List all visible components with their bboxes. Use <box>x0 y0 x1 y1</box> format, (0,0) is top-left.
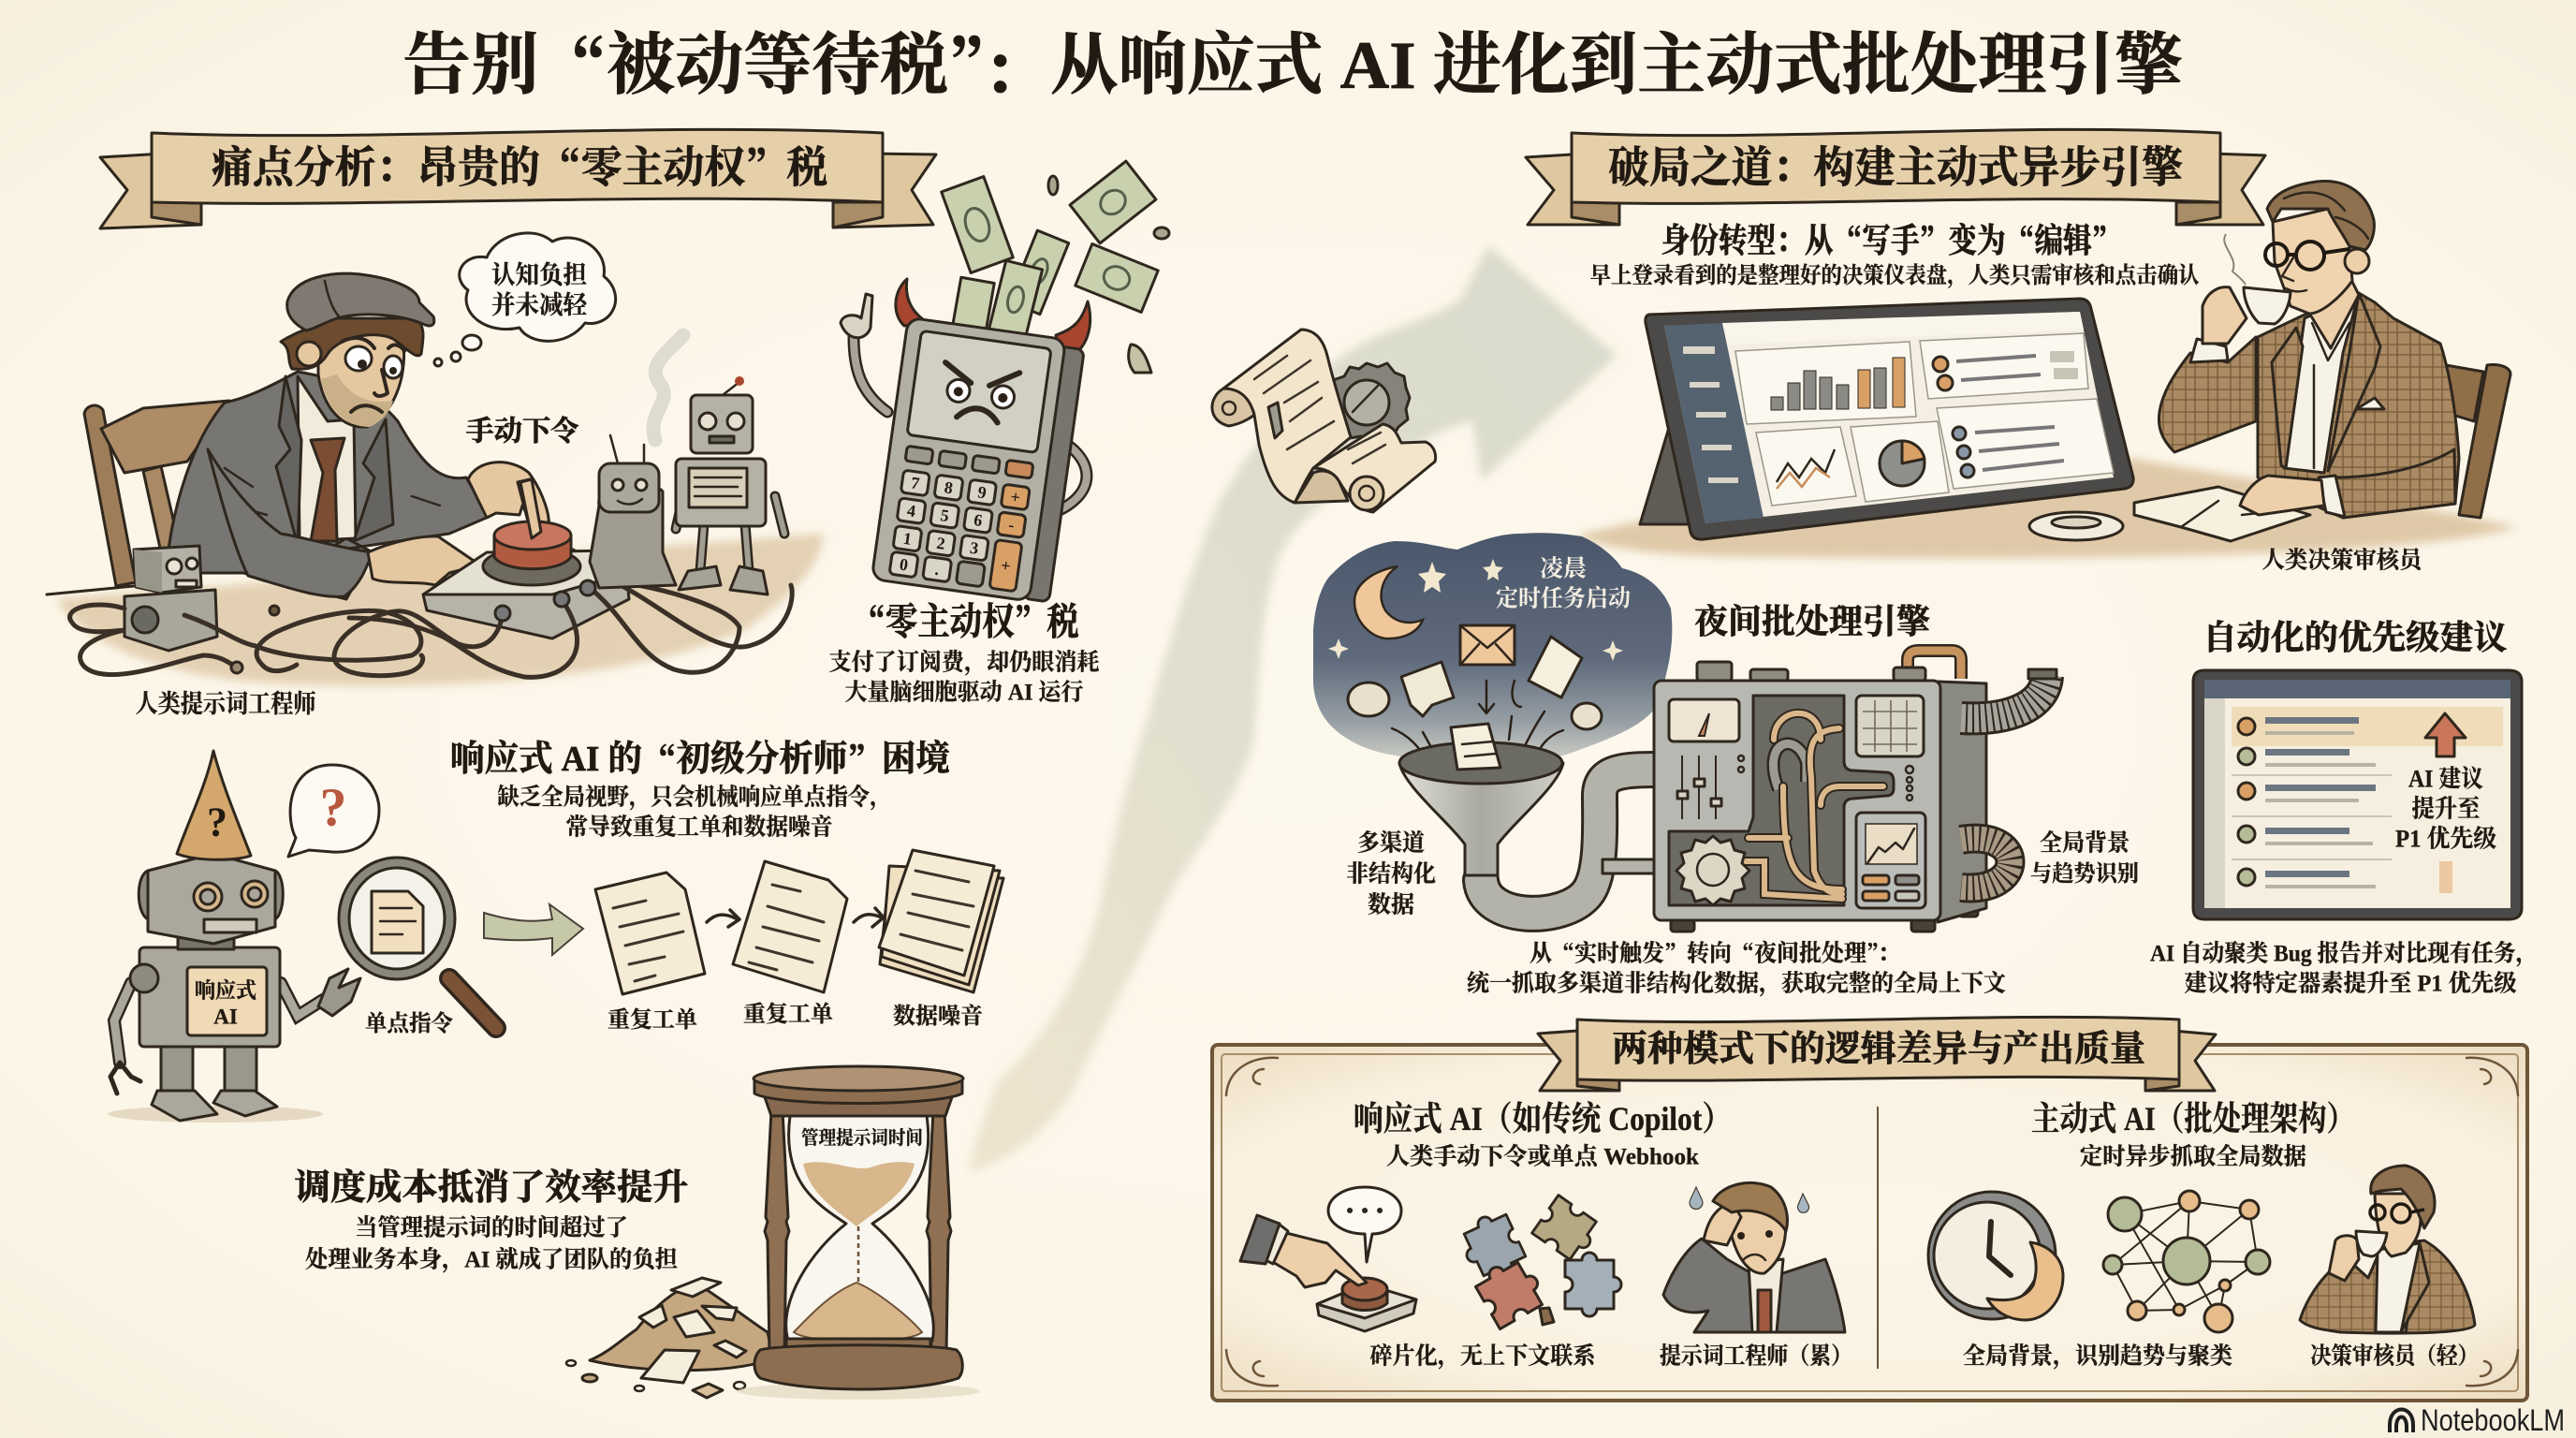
text: real-time to batch: 统一抓取多渠道非结构化数据，获取完整的全局上下文 <box>1467 970 2006 998</box>
face <box>2273 209 2352 314</box>
icon: calculator body: + <box>1009 487 1021 507</box>
illustration: priority tablet <box>2193 670 2522 919</box>
icon: calculator body: + <box>1000 556 1012 576</box>
label: multi-channel unstructured data: 非结构化 <box>1346 861 1436 888</box>
chart: pie chart card <box>1851 421 1949 502</box>
heading: nightly batch engine: 夜间批处理引擎 <box>1694 603 1930 640</box>
text: zero initiative tax: 大量脑细胞驱动 AI 运行 <box>844 680 1084 706</box>
icon: magnifying glass with single instruction <box>339 858 496 1028</box>
chart: line chart card <box>1756 427 1856 506</box>
icon: calculator arms and horns <box>841 279 1090 515</box>
illustration: priority tablet: 提升至 <box>2411 794 2481 822</box>
lower hand <box>2240 476 2324 515</box>
icon: document <box>1529 637 1582 697</box>
hair <box>2267 181 2374 250</box>
coffee cup <box>2244 287 2291 324</box>
text: AI clustering: 建议将特定器素提升至 P1 优先级 <box>2185 970 2516 996</box>
text: dispatch cost <box>294 1168 689 1273</box>
illustration: funnel and pipe <box>1399 724 1655 914</box>
icon: chat bubble <box>1348 682 1389 716</box>
icon: open book <box>2134 487 2310 541</box>
jacket <box>165 372 489 599</box>
icon: network graph <box>2103 1191 2270 1332</box>
illustration: responsive AI robot: ? <box>207 800 227 844</box>
icon: calculator body: 9 <box>976 482 988 502</box>
icon: calculator body: 6 <box>973 510 984 530</box>
illustration: two robots with smoke <box>590 335 784 594</box>
button box <box>423 550 629 638</box>
jacket <box>2258 293 2459 518</box>
arrow: ticket to ticket <box>707 910 739 927</box>
column: proactive AI <box>1928 1100 2479 1371</box>
illustration: zero-initiative calculator with flying money <box>841 161 1169 604</box>
title: 告别“被动等待税”：从响应式 AI 进化到主动式批处理引擎 <box>402 17 2183 114</box>
column: proactive AI: 决策审核员（轻） <box>2310 1343 2479 1369</box>
illustration: batch machine <box>1654 651 2056 932</box>
icon: wires <box>70 580 792 677</box>
column: responsive AI: 提示词工程师（累） <box>1660 1343 1852 1369</box>
text: AI clustering <box>2150 940 2538 996</box>
banner: pain points <box>100 129 936 228</box>
column: responsive AI: 碎片化，无上下文联系 <box>1370 1343 1596 1371</box>
icon: calculator body: - <box>1007 515 1016 535</box>
illustration: priority tablet: AI 建议 <box>2408 766 2483 792</box>
icon: calculator body: 8 <box>944 477 954 497</box>
table surface <box>56 534 824 685</box>
shirt <box>2284 293 2359 473</box>
icon: calculator body <box>871 317 1085 604</box>
text: AI clustering: AI 自动聚类 Bug 报告并对比现有任务， <box>2150 940 2538 968</box>
text: zero initiative tax <box>829 595 1099 706</box>
illustration: night cloud with data sources: 凌晨 <box>1540 556 1587 582</box>
card: action list <box>1937 399 2114 489</box>
arrow: raise to P1 <box>2425 713 2466 756</box>
label: global context: 与趋势识别 <box>2030 861 2139 887</box>
curved transition arrow <box>969 245 1617 1172</box>
text: identity shift: 身份转型：从“写手”变为“编辑” <box>1661 217 2121 264</box>
label: human decision reviewer: 人类决策审核员 <box>2261 547 2425 573</box>
text: junior analyst dilemma: 缺乏全局视野，只会机械响应单点指令， <box>498 783 891 811</box>
card: priority rows <box>1920 333 2088 399</box>
icon: flying bills <box>942 161 1169 373</box>
label: manual command: 手动下令 <box>466 416 578 448</box>
shirt <box>298 376 356 541</box>
illustration: night cloud with data sources: 定时任务启动 <box>1496 586 1631 612</box>
icon: calculator body: 7 <box>910 473 921 492</box>
illustration: human decision reviewer with coffee <box>2134 181 2510 541</box>
icon: question speech bubble: ? <box>320 777 346 837</box>
icon: calculator body: 3 <box>969 538 980 558</box>
column: responsive AI: 人类手动下令或单点 Webhook <box>1386 1142 1699 1170</box>
text: identity shift <box>1589 217 2200 288</box>
text: junior analyst dilemma: 响应式 AI 的“初级分析师”困境 <box>450 734 950 785</box>
text: junior analyst dilemma: 常导致重复工单和数据噪音 <box>565 814 833 841</box>
icon: gear in machine <box>1676 836 1749 905</box>
illustration: priority tablet: P1 优先级 <box>2395 824 2496 852</box>
illustration: night cloud with data sources <box>1313 533 1672 765</box>
illustration: responsive AI robot: 响应式 <box>195 979 256 1002</box>
icon: calculator body: 5 <box>939 506 950 525</box>
icon: upper hose <box>1961 676 2047 718</box>
column: proactive AI: 主动式 AI（批处理架构） <box>2031 1100 2355 1137</box>
text: real-time to batch: 从“实时触发”转向“夜间批处理”： <box>1530 937 1900 971</box>
icon: lower hose <box>1961 839 2011 888</box>
arrow: instruction to repeated tickets <box>484 904 583 955</box>
neck <box>2310 276 2359 348</box>
icon: clock and moon <box>1928 1192 2063 1320</box>
icon: ticket 1: 重复工单 <box>607 1007 697 1033</box>
hair <box>281 318 423 369</box>
chart panel <box>1856 813 1925 908</box>
section: thinking bubble: 并未减轻 <box>491 291 589 319</box>
icon: ticket 1 <box>595 873 705 1033</box>
column: proactive AI: 全局背景，识别趋势与聚类 <box>1963 1343 2232 1371</box>
illustration: responsive AI robot <box>108 751 360 1123</box>
lower hand <box>368 536 482 585</box>
label: multi-channel unstructured data <box>1346 829 1436 917</box>
panel: logic comparison <box>1212 1017 2527 1401</box>
column: responsive AI <box>1240 1100 1852 1371</box>
icon: hand presses button <box>1240 1187 1416 1331</box>
icon: calculator body: 2 <box>935 534 946 553</box>
icon: envelope <box>1460 625 1515 665</box>
icon: data noise papers <box>879 850 1003 1029</box>
column: proactive AI: 定时异步抓取全局数据 <box>2080 1144 2306 1170</box>
icon: puzzle pieces <box>1455 1196 1621 1329</box>
raised hand <box>2203 287 2247 344</box>
heading: automated priority: 自动化的优先级建议 <box>2203 619 2507 656</box>
illustration: prompt engineer at table <box>47 273 824 685</box>
illustration: desk with tablet dashboard <box>1575 299 2518 558</box>
column: responsive AI: 响应式 AI（如传统 Copilot） <box>1354 1100 1732 1137</box>
icon: ticket 2 <box>733 861 847 1027</box>
section: thinking bubble <box>434 233 616 366</box>
icon: data noise papers: 数据噪音 <box>893 1004 983 1029</box>
text: real-time to batch <box>1467 937 2006 998</box>
raised sleeve <box>2159 337 2256 452</box>
face <box>318 330 404 427</box>
icon: note <box>1401 662 1454 716</box>
chart: bar chart card <box>1735 342 1916 424</box>
text: zero initiative tax: 支付了订阅费，却仍眼消耗 <box>829 650 1099 676</box>
lapels <box>2272 328 2303 468</box>
tie <box>311 438 344 541</box>
label: single-point command: 单点指令 <box>365 1010 453 1036</box>
text: zero initiative tax: “零主动权”税 <box>854 595 1078 648</box>
icon: calculator body: 1 <box>902 529 913 549</box>
text: dispatch cost: 当管理提示词的时间超过了 <box>355 1215 628 1241</box>
text: dispatch cost: 调度成本抵消了效率提升 <box>294 1168 689 1208</box>
wooden chair <box>84 401 229 586</box>
label: global context: 全局背景 <box>2040 829 2130 856</box>
banner: breakthrough <box>1526 129 2265 225</box>
banner: logic comparison <box>1538 1017 2216 1091</box>
illustration: responsive AI robot: AI <box>213 1005 238 1028</box>
icon: calculator body: 0 <box>899 554 909 575</box>
icon: calculator body: 4 <box>906 501 916 521</box>
text: identity shift: 早上登录看到的是整理好的决策仪表盘，人类只需审核和点击确认 <box>1589 262 2200 288</box>
eyes <box>345 346 372 371</box>
upper hand <box>468 462 549 536</box>
illustration: scroll and gear <box>1212 330 1436 512</box>
flat cap <box>287 273 434 330</box>
left arm across <box>208 449 373 596</box>
illustration: hourglass: 管理提示词时间 <box>801 1127 923 1149</box>
chair <box>2446 364 2510 518</box>
banner: logic comparison: 两种模式下的逻辑差异与产出质量 <box>1612 1030 2145 1069</box>
text: junior analyst dilemma <box>450 734 950 841</box>
section: thinking bubble: 认知负担 <box>491 261 587 289</box>
illustration: hourglass <box>737 1066 980 1400</box>
label: prompt engineer: 人类提示词工程师 <box>135 689 316 718</box>
glasses <box>2265 242 2349 270</box>
icon: calculator body: . <box>934 560 941 579</box>
icon: stressed engineer <box>1663 1182 1845 1332</box>
icon: question speech bubble <box>288 765 379 857</box>
icon: small bubble <box>1572 703 1602 729</box>
banner: breakthrough: 破局之道：构建主动式异步引擎 <box>1608 144 2183 191</box>
label: global context <box>2030 829 2139 887</box>
icon: small robot with fan box <box>124 546 217 651</box>
arrow: ticket to noise <box>854 908 884 927</box>
icon: reviewer with coffee <box>2300 1166 2475 1333</box>
banner: pain points: 痛点分析：昂贵的“零主动权”税 <box>212 137 827 198</box>
text: dispatch cost: 处理业务本身，AI 就成了团队的负担 <box>305 1245 678 1273</box>
icon: saucer <box>2029 512 2123 540</box>
lower sleeve <box>2334 449 2455 518</box>
label: multi-channel unstructured data: 数据 <box>1368 891 1414 917</box>
label: multi-channel unstructured data: 多渠道 <box>1357 829 1425 856</box>
icon: ticket 2: 重复工单 <box>743 1002 833 1027</box>
illustration: pile of dirt and paper <box>566 1278 773 1398</box>
